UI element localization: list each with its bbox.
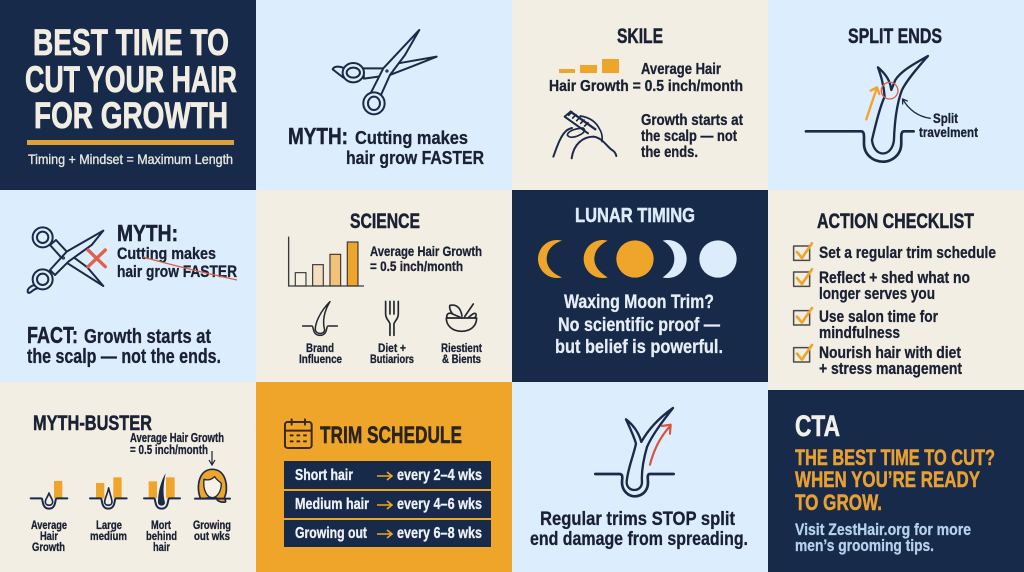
table: row medium hair: [284, 491, 491, 518]
icon: salad bowl: [446, 304, 477, 331]
text: myth statement: [288, 123, 484, 168]
panel: skile: [512, 0, 768, 190]
panel: myth and fact: [0, 190, 256, 382]
labels: icon captions: Brand: [306, 341, 334, 355]
text: crossed out myth: Cutting makes: [117, 244, 216, 263]
labels: follicle captions: out wks: [194, 529, 230, 543]
icon: woman with long hair: [195, 469, 230, 502]
heading: skile: SKILE: [617, 24, 663, 48]
heading: cta: CTA: [795, 410, 840, 443]
text: checklist items: + stress management: [819, 359, 962, 378]
heading: main title: [25, 21, 237, 136]
icon: moon phases: [538, 240, 737, 278]
panel: lunar timing: [512, 190, 768, 382]
panel: trim schedule: [256, 382, 512, 572]
text: visit link: men’s grooming tips.: [795, 537, 934, 555]
panel: myth scissors: [256, 0, 512, 190]
icon: scissors: [333, 30, 437, 114]
table: row growing out: every 6–8 wks: [397, 525, 482, 542]
labels: follicle captions: hair: [153, 540, 170, 554]
table: row medium hair: Medium hair: [295, 496, 369, 513]
panel: split ends: [768, 0, 1024, 190]
heading: main title: FOR GROWTH: [34, 94, 228, 136]
text: visit link: Visit ZestHair.org for more: [795, 521, 971, 539]
table: row growing out: [284, 520, 491, 547]
labels: follicle captions: Large: [96, 518, 122, 532]
icon: check boxes: [794, 243, 812, 362]
icon: average follicle: [31, 481, 67, 509]
heading: science: SCIENCE: [350, 209, 420, 233]
icon: follicle with red arrow: [595, 408, 674, 496]
table: row short hair: [284, 461, 491, 489]
text: average growth note: = 0.5 inch/month: [130, 443, 208, 457]
text: average growth: Average Hair Growth: [370, 243, 482, 259]
panel: myth-buster: [0, 382, 256, 572]
text: checklist items: longer serves you: [819, 284, 935, 303]
text: checklist items: Nourish hair with diet: [819, 343, 961, 362]
labels: follicle captions: Growth: [32, 540, 65, 554]
heading: myth-buster: MYTH-BUSTER: [33, 411, 152, 435]
labels: icon captions: & Bients: [442, 352, 481, 366]
heading: main title: BEST TIME TO: [33, 21, 229, 63]
labels: follicle captions: Hair: [40, 529, 58, 543]
text: crossed out myth: [117, 220, 237, 281]
text: crossed out myth: MYTH:: [117, 220, 178, 246]
text: growth starts at scalp: Growth starts at: [641, 112, 743, 129]
arrow: down to hair: [209, 451, 215, 465]
panel: action checklist: [768, 190, 1024, 382]
subtitle: Timing + Mindset = Maximum Length: [28, 151, 233, 167]
labels: follicle captions: medium: [90, 529, 127, 543]
text: checklist items: Use salon time for: [819, 307, 938, 326]
labels: icon captions: Diet +: [378, 341, 406, 355]
text: split travelment: Split: [933, 110, 958, 126]
text: fact: Growth starts at: [84, 326, 211, 348]
labels: icon captions: Riestient: [441, 341, 482, 355]
text: myth statement: hair grow FASTER: [346, 147, 484, 168]
text: cta headline: [795, 445, 995, 515]
text: crossed out myth: hair grow FASTER: [117, 262, 237, 281]
text: fact: the scalp — not the ends.: [27, 346, 221, 368]
panel: cta: [768, 382, 1024, 572]
text: average growth: = 0.5 inch/month: [370, 258, 463, 274]
labels: follicle captions: Average: [31, 518, 67, 532]
table: row medium hair: every 4–6 wks: [397, 496, 482, 513]
text: average growth: [370, 243, 482, 274]
icon: hand with comb: [553, 112, 616, 158]
text: average growth note: [130, 431, 224, 457]
panel: title: [0, 0, 256, 190]
labels: follicle captions: [31, 518, 231, 554]
table: row short hair: Short hair: [295, 467, 353, 484]
heading: trim schedule: TRIM SCHEDULE: [320, 422, 462, 449]
text: growth starts at scalp: [641, 112, 743, 161]
icon: calendar: [285, 419, 312, 448]
text: growth starts at scalp: the scalp — not: [641, 128, 737, 145]
icon: growth bars: [559, 59, 619, 73]
heading: lunar timing: LUNAR TIMING: [575, 204, 695, 227]
text: regular trims: end damage from spreading.: [530, 528, 748, 550]
labels: follicle captions: behind: [146, 529, 177, 543]
icon: red x: [88, 250, 105, 267]
text: average hair growth: [549, 61, 743, 95]
text: waxing moon: Waxing Moon Trim?: [564, 291, 714, 313]
table: row short hair: every 2–4 wks: [397, 467, 482, 484]
text: myth statement: MYTH:: [288, 123, 348, 149]
text: split travelment: [919, 110, 978, 140]
text: average hair growth: Average Hair: [641, 61, 721, 78]
text: checklist items: mindfulness: [819, 323, 900, 342]
text: myth statement: Cutting makes: [355, 127, 468, 148]
labels: icon captions: Influence: [299, 352, 342, 366]
heading: action checklist: ACTION CHECKLIST: [817, 209, 974, 233]
icon: fork: [386, 301, 398, 335]
icon: large follicle: [90, 477, 127, 509]
text: growth starts at scalp: the ends.: [641, 144, 698, 161]
labels: icon captions: [299, 341, 482, 366]
text: fact: FACT:: [27, 322, 78, 348]
text: waxing moon: [555, 291, 723, 358]
text: visit link: [795, 521, 971, 555]
text: regular trims: Regular trims STOP split: [540, 508, 735, 530]
labels: follicle captions: Mort: [151, 518, 171, 532]
text: waxing moon: but belief is powerful.: [555, 336, 723, 358]
text: checklist items: Reflect + shed what no: [819, 268, 970, 287]
text: fact: [27, 322, 221, 368]
text: cta headline: TO GROW.: [795, 490, 882, 515]
icon: hair strand: [303, 302, 337, 335]
labels: follicle captions: Growing: [193, 518, 231, 532]
text: checklist items: [819, 243, 996, 378]
panel: regular trims: [512, 382, 768, 572]
icon: split hair follicle: [806, 56, 930, 162]
text: regular trims: [530, 508, 748, 550]
labels: icon captions: Butiariors: [370, 352, 414, 366]
text: average hair growth: Hair Growth = 0.5 inch/month: [549, 78, 743, 95]
icon: tall hair follicle: [144, 473, 180, 509]
heading: split ends: SPLIT ENDS: [848, 24, 942, 48]
text: average growth note: Average Hair Growth: [130, 431, 224, 445]
bar chart: [289, 237, 364, 286]
text: waxing moon: No scientific proof —: [558, 314, 720, 336]
text: split travelment: travelment: [919, 124, 978, 140]
icon: crossed scissors: [28, 227, 103, 293]
panel: science: [256, 190, 512, 382]
heading: main title: CUT YOUR HAIR: [25, 58, 237, 100]
table: row growing out: Growing out: [295, 525, 367, 542]
